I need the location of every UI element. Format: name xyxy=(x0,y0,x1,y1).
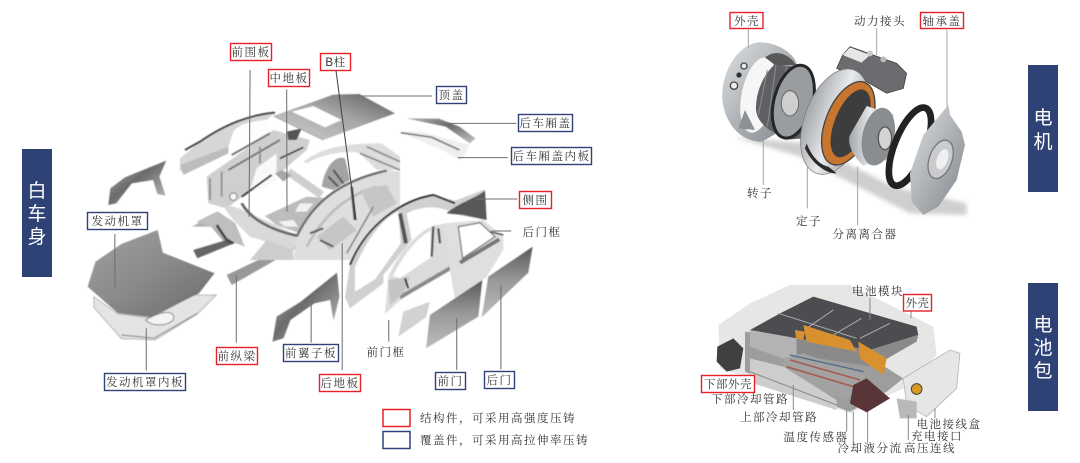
label: rear floor: 后地板 xyxy=(320,376,360,390)
separation clutch xyxy=(849,106,893,166)
bearing cover xyxy=(910,105,965,215)
gasket ring xyxy=(880,102,940,191)
label: hood inner panel xyxy=(104,374,186,390)
side label: motor xyxy=(1028,65,1058,192)
far fender xyxy=(108,161,166,205)
legend xyxy=(383,410,589,448)
side label: motor: 电 xyxy=(1033,107,1053,129)
label: front rail xyxy=(216,348,258,364)
hood xyxy=(88,230,215,317)
motor label: housing xyxy=(730,12,763,28)
label: B pillar xyxy=(320,54,350,70)
hood inner panel xyxy=(94,295,216,340)
rear roof rail and parcel shelf xyxy=(303,143,400,170)
label: mid floor xyxy=(268,70,310,86)
near-side inner body xyxy=(293,170,400,260)
lower body xyxy=(745,332,903,412)
label: front door frame: 前门框 xyxy=(366,345,406,359)
battery label: coolant distribution: 冷却液分流 xyxy=(838,441,902,455)
stator xyxy=(787,59,883,184)
battery label: lower case: 下部外壳 xyxy=(704,377,752,391)
label: front door xyxy=(436,372,466,390)
car center section xyxy=(180,94,400,260)
motor label: stator: 定子 xyxy=(796,215,822,228)
legend: structural parts xyxy=(383,410,576,426)
motor leader lines xyxy=(748,28,947,225)
near side frame and doors xyxy=(345,190,533,348)
rear door frame xyxy=(443,220,503,300)
battery label: lower case xyxy=(702,376,754,392)
battery label: charging port: 充电接口 xyxy=(911,429,963,443)
label: rear door xyxy=(484,372,514,388)
battery case xyxy=(718,285,937,413)
label: front fender: 前翼子板 xyxy=(285,346,337,360)
battery label: module: 电池模块 xyxy=(852,284,904,298)
outer panels xyxy=(88,118,475,342)
side label: battery pack: 池 xyxy=(1033,337,1053,359)
central opening xyxy=(282,147,333,197)
battery label: junction box: 电池接线盒 xyxy=(916,417,982,431)
left engine bay part xyxy=(192,212,242,243)
legend: structural parts: 结构件，可采用高强度压铸 xyxy=(420,411,576,425)
cowl and front arch xyxy=(223,206,300,250)
label: trunk inner panel xyxy=(512,148,592,164)
trunk lid xyxy=(406,118,475,143)
battery label: case xyxy=(904,294,932,311)
motor label: power connector: 动力接头 xyxy=(854,14,906,28)
label: side frame xyxy=(520,192,552,208)
orange connectors xyxy=(795,325,887,375)
engine bay lower xyxy=(197,212,245,247)
label: B pillar: B柱 xyxy=(325,55,346,69)
exploded motor illustration xyxy=(722,28,967,225)
motor label: housing: 外壳 xyxy=(734,14,760,28)
label: rear door: 后门 xyxy=(486,373,512,387)
battery modules xyxy=(750,297,918,350)
motor label: rotor: 转子 xyxy=(747,186,773,200)
label: roof xyxy=(436,86,466,104)
battery label: temperature sensor: 温度传感器 xyxy=(784,430,848,444)
battery label: upper cooling pipe: 上部冷却管路 xyxy=(740,410,818,424)
exploded car body illustration xyxy=(88,94,533,348)
battery label: case: 外壳 xyxy=(906,296,930,310)
legend: cover parts xyxy=(383,432,589,448)
label: trunk lid xyxy=(518,114,572,132)
front pillars and dash xyxy=(207,130,310,208)
junction box xyxy=(903,350,960,417)
front door frame xyxy=(385,223,455,314)
motor label: clutch: 分离离合器 xyxy=(832,227,898,241)
trunk inner panel xyxy=(398,132,470,161)
side label: motor: 机 xyxy=(1033,131,1053,153)
leader lines for car body xyxy=(115,70,517,371)
side label: body in white: 身 xyxy=(27,226,47,248)
label: rear door frame: 后门框 xyxy=(522,225,562,239)
front longitudinal rail xyxy=(227,243,299,285)
battery pack illustration xyxy=(717,285,960,443)
label: mid floor: 中地板 xyxy=(270,71,308,85)
floor xyxy=(265,197,330,233)
label: hood xyxy=(88,212,148,230)
cross bar xyxy=(288,172,322,195)
label: front door: 前门 xyxy=(438,374,464,388)
side label: body in white xyxy=(22,149,52,277)
front fender xyxy=(273,273,339,342)
label: hood: 发动机罩 xyxy=(92,214,144,228)
side label: body in white: 白 xyxy=(27,180,47,202)
motor housing xyxy=(722,42,797,142)
battery leader lines xyxy=(793,298,935,443)
rotor xyxy=(756,64,805,139)
label: trunk lid: 后车厢盖 xyxy=(520,117,572,130)
label: front rail: 前纵梁 xyxy=(218,349,256,363)
side label: battery pack: 电 xyxy=(1033,314,1053,336)
label: trunk inner panel: 后车厢盖内板 xyxy=(512,149,590,163)
label: roof: 顶盖 xyxy=(438,89,464,102)
cooling pipes xyxy=(783,353,867,400)
floor shadow xyxy=(733,137,967,215)
label: hood inner panel: 发动机罩内板 xyxy=(106,375,184,389)
side label: battery pack xyxy=(1028,283,1058,411)
side label: body in white: 车 xyxy=(27,203,47,225)
label: front wall panel xyxy=(230,44,272,60)
battery label: lower cooling pipe: 下部冷却管路 xyxy=(711,392,789,406)
legend: cover parts: 覆盖件，可采用高拉伸率压铸 xyxy=(420,433,589,447)
label: front fender xyxy=(284,344,338,362)
rear door outer xyxy=(482,247,533,317)
end bracket xyxy=(717,338,743,372)
label: front wall panel: 前围板 xyxy=(232,45,270,59)
side label: battery pack: 包 xyxy=(1033,360,1053,382)
side frame xyxy=(345,190,487,308)
motor label: bearing cover xyxy=(920,12,964,28)
roof panel xyxy=(273,94,395,140)
front door outer xyxy=(426,280,482,348)
far side frame xyxy=(180,113,275,172)
battery label: high voltage wiring: 高压连线 xyxy=(904,441,956,455)
power connector xyxy=(837,47,907,93)
label: rear floor xyxy=(320,374,360,392)
label: side frame: 侧围 xyxy=(522,194,548,207)
motor label: bearing cover: 轴承盖 xyxy=(922,14,962,28)
